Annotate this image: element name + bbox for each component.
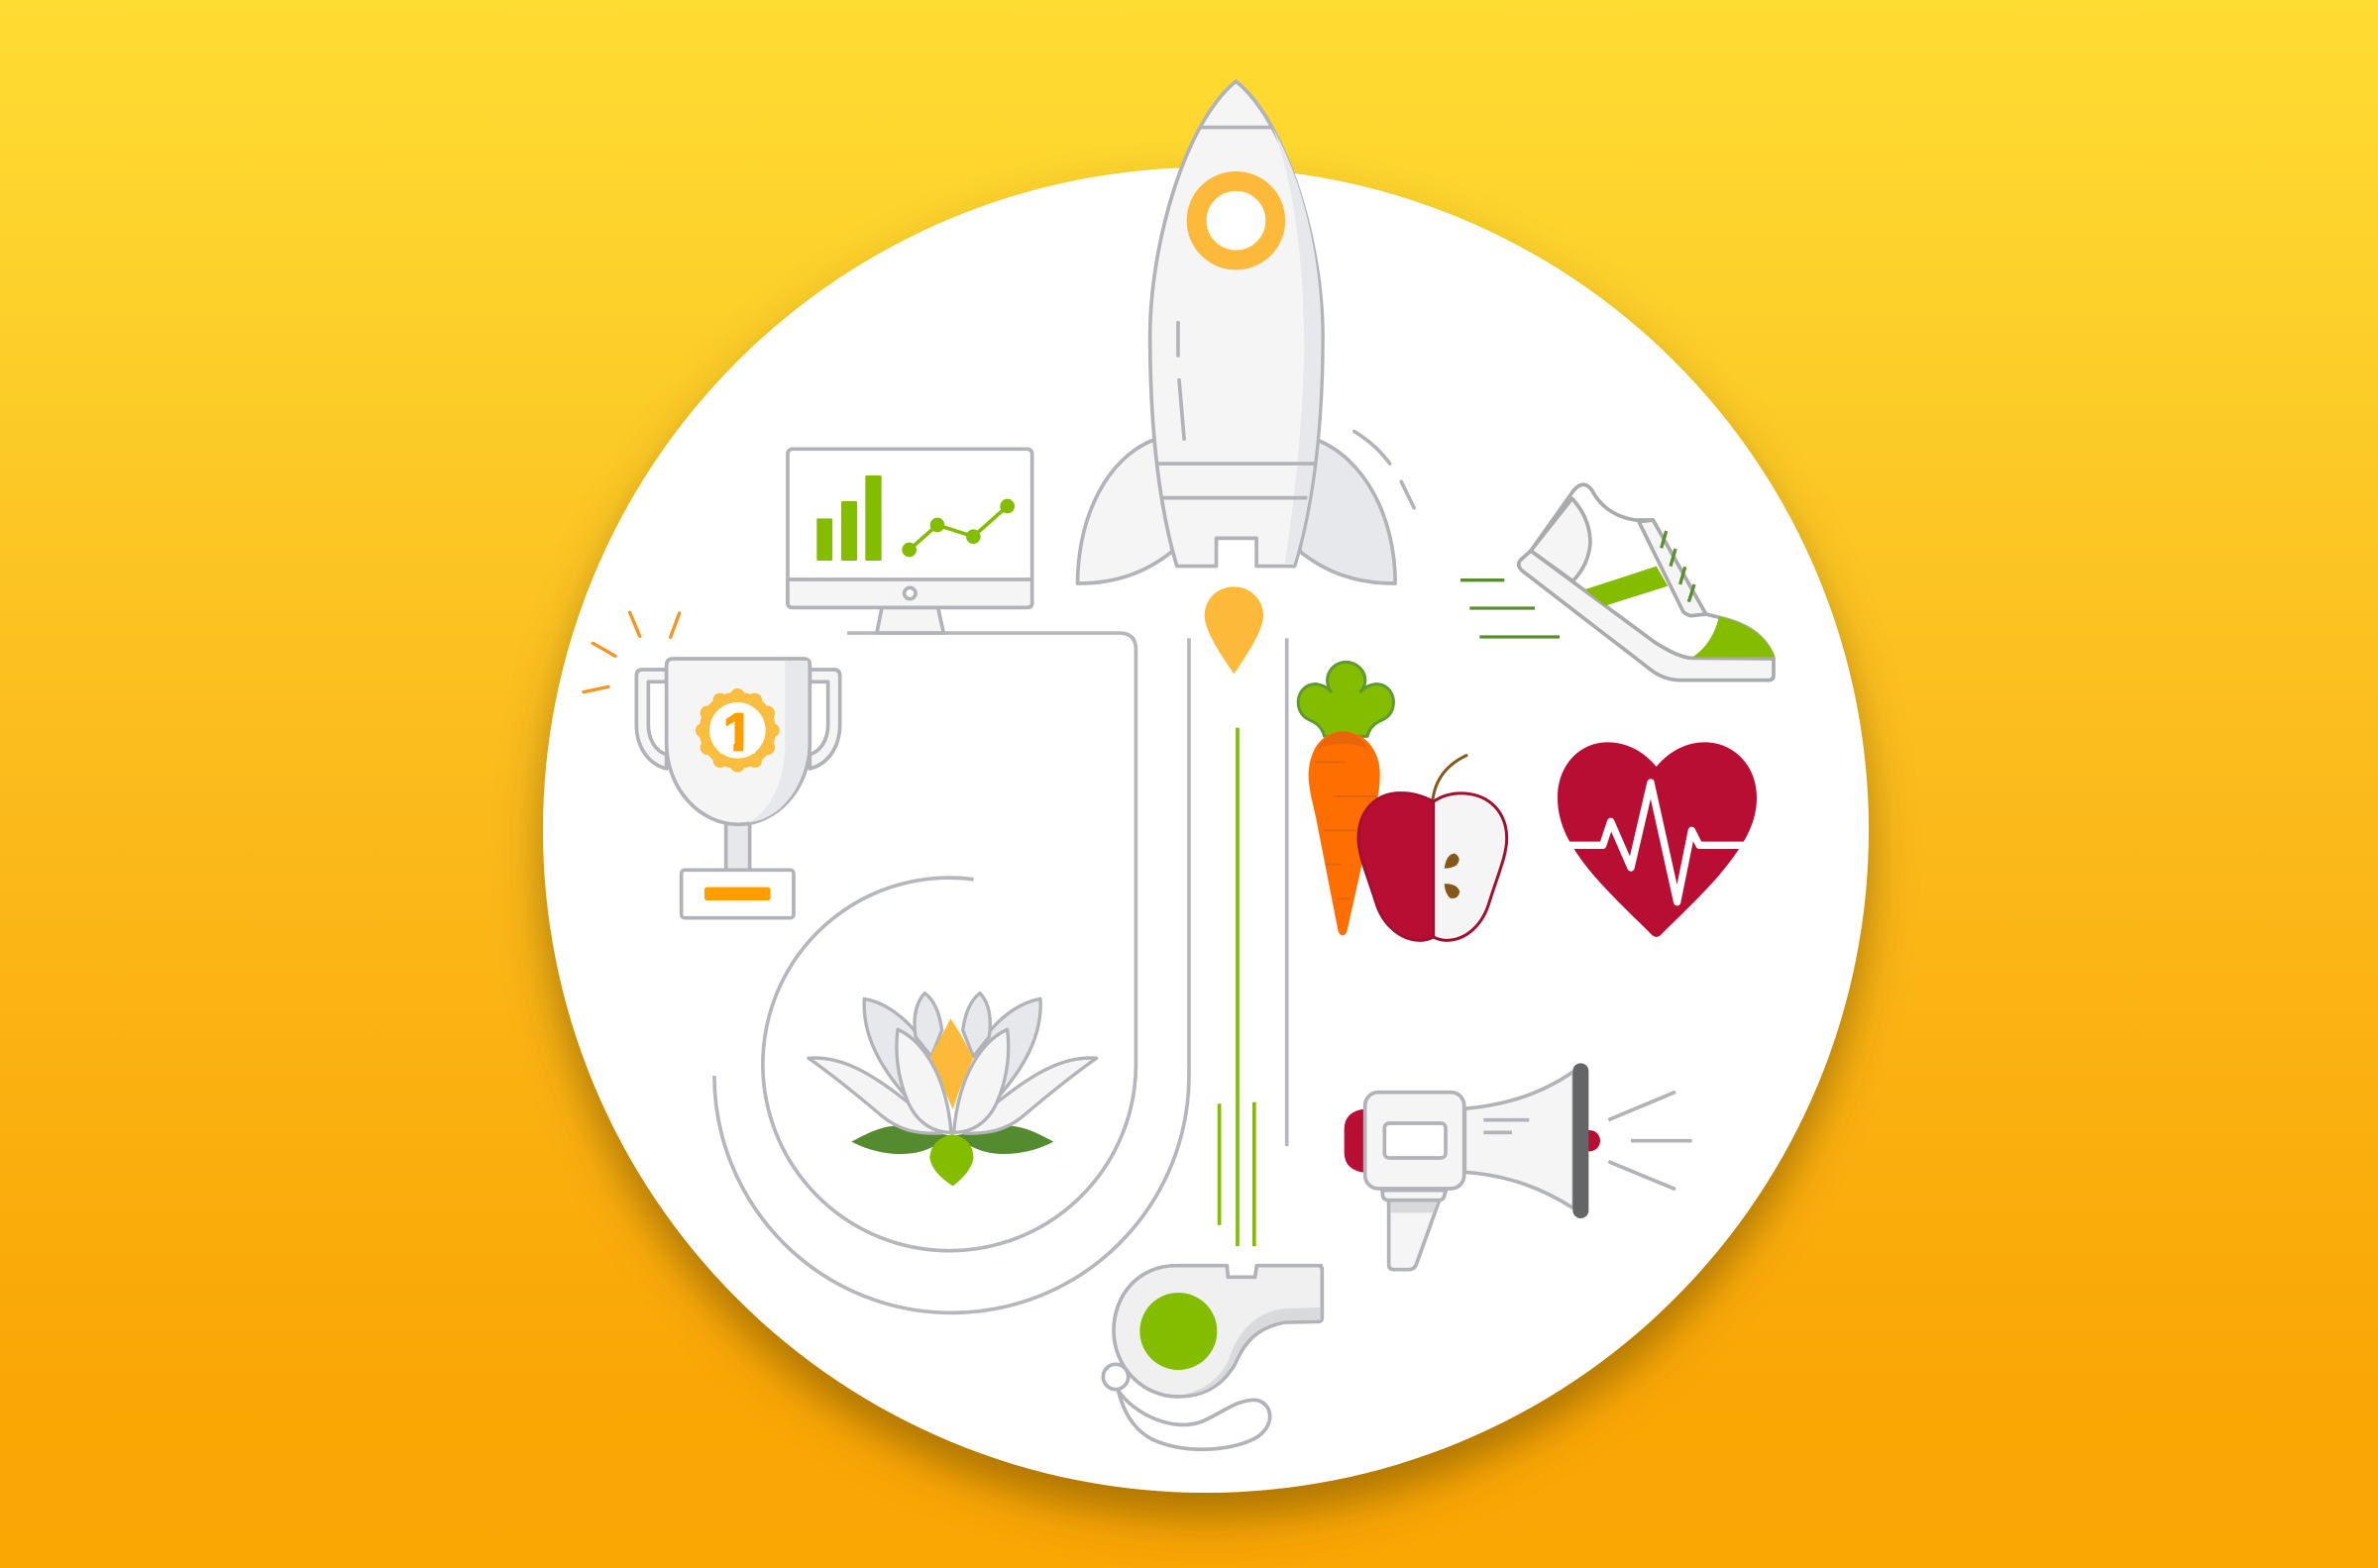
celebration rays [584, 612, 680, 692]
pulse line [1567, 783, 1747, 902]
yellow center [930, 1018, 973, 1109]
monitor chin [788, 579, 1032, 607]
icon: carrot [1298, 662, 1393, 935]
horn lines [1483, 1120, 1529, 1132]
line chart [902, 499, 1015, 557]
power button [905, 587, 916, 599]
carrot top shade [1318, 731, 1368, 749]
icon: rocket [1077, 81, 1414, 583]
heel [1531, 498, 1590, 581]
icon: water lily [809, 993, 1097, 1186]
lily pads [851, 1126, 1053, 1154]
speed lines [1460, 580, 1560, 637]
body [1365, 1093, 1464, 1189]
monitor stand [877, 607, 943, 633]
left fin [1077, 440, 1172, 583]
upper [1531, 484, 1774, 658]
green launch lines [1220, 728, 1254, 1246]
porthole [1197, 181, 1275, 260]
window [1384, 1123, 1446, 1158]
back petals [864, 993, 1040, 1102]
body bands [1158, 128, 1314, 498]
sole [1519, 551, 1774, 680]
icon: whistle [1103, 1266, 1322, 1449]
rim [1572, 1063, 1588, 1218]
trophy base [682, 870, 794, 918]
handle [1389, 1201, 1440, 1270]
carrot lines [1316, 762, 1375, 898]
whistle dot [1139, 1293, 1217, 1370]
whistle body [1114, 1266, 1322, 1397]
base plate [704, 888, 771, 900]
carrot root [1309, 731, 1380, 935]
apple cut half [1434, 793, 1507, 940]
side petals [809, 1058, 1097, 1133]
sound rays [1608, 1092, 1692, 1190]
cup [667, 659, 810, 824]
icon: heart with pulse [1558, 742, 1757, 937]
body dashes [1178, 323, 1184, 439]
apple seeds [1445, 854, 1459, 898]
motion ticks [1354, 432, 1414, 508]
bar chart [816, 475, 882, 561]
medal [696, 688, 780, 773]
handle shade [1390, 1202, 1438, 1212]
front petals [897, 1029, 1009, 1132]
stem [726, 824, 750, 870]
lanyard ring [1103, 1364, 1129, 1390]
icon: megaphone [1345, 1063, 1692, 1270]
icon: computer monitor with charts [788, 449, 1032, 633]
toe cap [1692, 617, 1775, 657]
cup shade [748, 661, 808, 822]
monitor screen [788, 449, 1032, 607]
horn [1464, 1072, 1573, 1208]
heart shape [1558, 742, 1757, 937]
carrot leaves [1298, 662, 1393, 736]
speaker tip [1579, 1130, 1600, 1151]
lanyard [1118, 1390, 1270, 1449]
icon: running shoe [1460, 484, 1775, 680]
apple skin half [1358, 793, 1434, 940]
tongue panel [1639, 520, 1706, 616]
back cap [1345, 1108, 1365, 1173]
left handle [636, 670, 667, 769]
white circle panel [543, 167, 1869, 1493]
right handle [810, 670, 840, 769]
track lines [714, 633, 1287, 1312]
laces [1662, 531, 1694, 602]
collar [1382, 1191, 1446, 1201]
number foot mask [720, 742, 755, 754]
body shade [1273, 129, 1321, 565]
rocket body [1150, 81, 1323, 567]
icon: apple [1358, 756, 1507, 940]
center leaf [929, 1134, 973, 1186]
whistle shade [1186, 1307, 1321, 1394]
right fin [1300, 440, 1395, 583]
green stripe [1585, 567, 1668, 606]
apple stem [1433, 756, 1466, 799]
icon: location pin [1205, 586, 1263, 674]
medal number: 1 [723, 703, 753, 762]
icon: trophy [584, 612, 840, 918]
